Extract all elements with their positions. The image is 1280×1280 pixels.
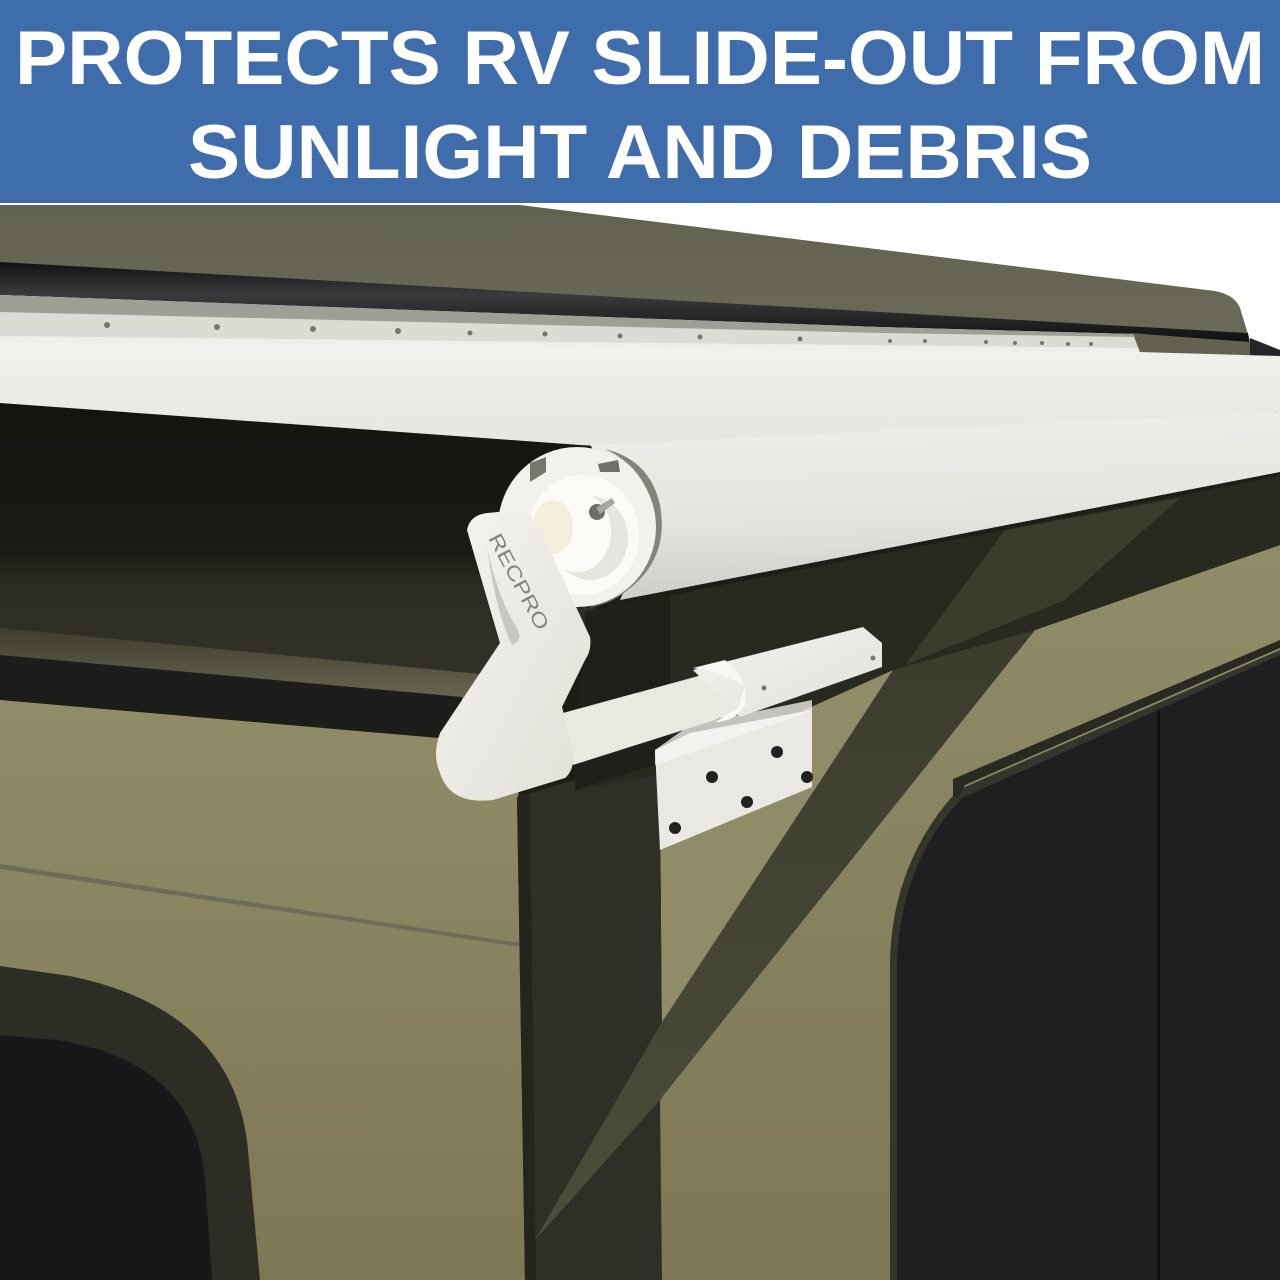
brand text: RECPRO [484, 530, 553, 634]
dark upper right panel [575, 476, 1280, 790]
black roof trim [0, 262, 1250, 343]
dark corner column [517, 755, 664, 1280]
black slide-out trim [0, 655, 462, 740]
fabric canopy [0, 342, 1280, 448]
RV roof slide-out cover [0, 205, 1248, 334]
door rail [953, 640, 1280, 798]
door split [1157, 710, 1160, 1280]
far end below roof [1130, 333, 1252, 358]
slide-out top edge [0, 628, 480, 702]
dark base behind the hardware [0, 400, 1280, 1280]
support arm [563, 627, 882, 765]
cap raised rings [527, 475, 639, 595]
door panels [897, 655, 1280, 1280]
awning metal rail [0, 295, 1140, 352]
window frame [0, 966, 260, 1280]
banner [0, 0, 1280, 203]
title [15, 16, 1265, 195]
lighter panel stripe [905, 498, 1180, 665]
awning roll [498, 412, 1280, 607]
cap spindle [533, 500, 573, 554]
cap brackets [530, 457, 546, 482]
title: SUNLIGHT AND DEBRIS [188, 110, 1092, 195]
crank handle [436, 510, 590, 801]
window glass [0, 1035, 212, 1280]
diagonal dark stripe [535, 630, 1035, 1240]
shadowed space beneath canopy [0, 403, 600, 700]
olive wall left [0, 700, 525, 1280]
wall seam [0, 864, 520, 947]
rail rivets [104, 322, 1093, 346]
brand swoosh [487, 545, 519, 645]
cap pin [589, 498, 615, 520]
right olive wall [660, 545, 1280, 1280]
title: PROTECTS RV SLIDE-OUT FROM [15, 16, 1265, 101]
roll end cap [498, 447, 656, 607]
roll end metal ring [590, 449, 662, 607]
mounting plate [655, 700, 813, 850]
column shade strip [517, 793, 536, 1280]
door frame [890, 650, 1280, 1280]
olive wedge beside column [660, 670, 893, 1025]
